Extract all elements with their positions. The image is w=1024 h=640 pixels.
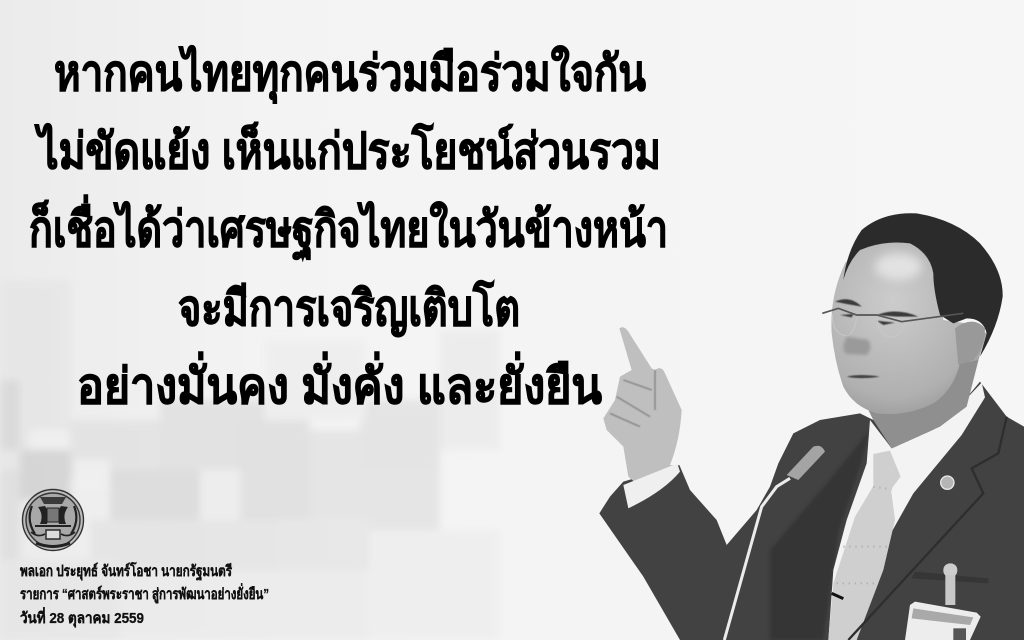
headline line 2: ไม่ขัดแย้ง เห็นแก่ประโยชน์ส่วนรวม — [34, 121, 661, 179]
background mosaic — [0, 280, 500, 640]
headline line 1: หากคนไทยทุกคนร่วมมือร่วมใจกัน — [54, 44, 646, 104]
eyebrows and eyes — [835, 299, 918, 325]
headline quote — [29, 44, 668, 414]
jacket inner shadow — [770, 430, 870, 640]
jacket — [599, 382, 1024, 640]
forehead highlight — [875, 253, 922, 280]
shirt cuff — [623, 463, 680, 508]
pen in pocket — [832, 593, 843, 599]
headline line 4: จะมีการเจริญเติบโต — [178, 279, 520, 337]
caption line: programme: รายการ “ศาสตร์พระราชา สู่การพัฒนาอย่างยั่งยืน” — [20, 583, 269, 604]
finger lines — [610, 370, 655, 427]
microphone head — [787, 446, 825, 480]
necktie — [828, 451, 901, 640]
right lapel edge — [848, 417, 1007, 640]
hair — [843, 213, 1003, 357]
icon: government seal — [22, 490, 84, 550]
lapel pin — [941, 476, 954, 489]
ear — [955, 322, 985, 365]
glasses — [822, 308, 963, 337]
source caption — [20, 561, 269, 628]
microphone stand — [724, 478, 790, 640]
figure: speaker portrait — [599, 213, 1024, 640]
headline line 5: อย่างมั่นคง มั่งคั่ง และยั่งยืน — [77, 351, 602, 414]
face — [831, 240, 987, 414]
headline line 3: ก็เชื่อได้ว่าเศรษฐกิจไทยในวันข้างหน้า — [29, 194, 668, 261]
name badge — [905, 563, 981, 640]
pocket — [912, 572, 988, 583]
hand — [603, 327, 682, 487]
shirt collar and front — [828, 383, 985, 640]
nose and mouth — [843, 337, 870, 355]
caption line: speaker: พลเอก ประยุทธ์ จันทร์โอชา นายกรัฐมนตรี — [20, 561, 233, 581]
caption line: date: วันที่ 28 ตุลาคม 2559 — [20, 607, 144, 628]
neck — [857, 357, 979, 448]
